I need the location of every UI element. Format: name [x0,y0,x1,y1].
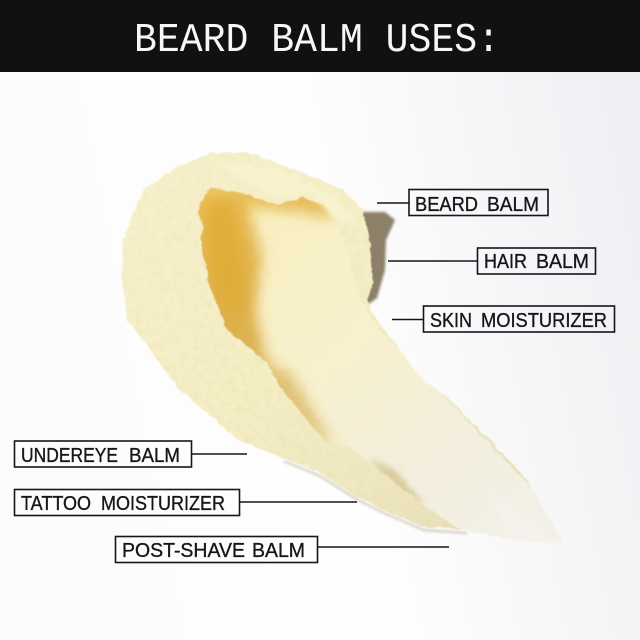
label: tattoo moisturizer [14,490,357,516]
label: post-shave balm [116,536,449,562]
label: skin moisturizer: MOISTURIZER [481,310,607,332]
edge shadow: lower [284,461,467,533]
label: beard balm: BALM [487,194,539,216]
label: undereye balm: UNDEREYE [21,445,118,467]
tip fade [490,490,570,550]
label: beard balm: BEARD [415,194,478,216]
label: hair balm [388,248,596,274]
label: undereye balm [14,441,247,467]
label: hair balm: BALM [536,251,589,273]
balm body [120,152,562,544]
title: BEARD BALM USES: [134,18,500,64]
label: tattoo moisturizer: TATTOO [21,493,91,515]
label: tattoo moisturizer: MOISTURIZER [101,493,225,515]
label: undereye balm: BALM [129,445,180,467]
label: post-shave balm: BALM [252,540,305,562]
label: post-shave balm: POST-SHAVE [122,540,245,562]
label: skin moisturizer [392,306,614,332]
title bar [0,0,640,72]
cast shadow [360,212,395,306]
label: hair balm: HAIR [484,251,527,273]
top crumb highlight [232,164,350,222]
golden hollow and smooth cream [198,187,562,544]
label: beard balm [377,190,548,216]
photo: balm smear [120,152,562,544]
label: skin moisturizer: SKIN [430,310,472,332]
